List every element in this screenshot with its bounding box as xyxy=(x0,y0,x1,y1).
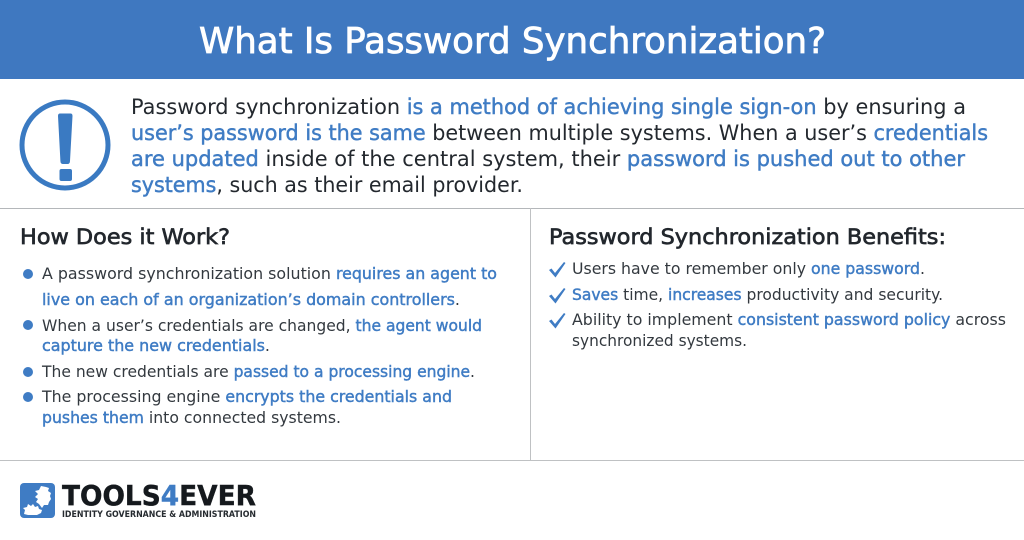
intro text block: Password synchronization is a method of achieving single sign-on by ensuring a xyxy=(131,95,966,120)
check list: benefits: synchronized systems. xyxy=(572,331,747,350)
bullet list: steps: capture the new credentials. xyxy=(42,336,270,355)
check list: benefits: Ability to implement consistent password policy across xyxy=(572,310,1006,329)
bullet list: steps: The new credentials are passed to a processing engine. xyxy=(41,362,475,381)
intro text block: systems, such as their email provider. xyxy=(131,173,523,198)
icon: exclamation mark in circle xyxy=(22,102,108,188)
icon: logo mark xyxy=(20,483,55,518)
check list: benefits xyxy=(549,259,1006,350)
bullet list: steps: The processing engine encrypts the credentials and xyxy=(41,387,452,406)
bullet list: steps: pushes them into connected systems. xyxy=(42,408,341,427)
intro text block: are updated inside of the central system, their password is pushed out to other xyxy=(131,147,965,172)
bullet list: steps: live on each of an organization’s domain controllers. xyxy=(42,290,460,309)
intro text block: user’s password is the same between multiple systems. When a user’s credentials xyxy=(131,121,988,146)
panel: benefits xyxy=(549,225,1006,350)
heading: benefits: Password Synchronization Benefits: xyxy=(549,225,946,250)
bullet list: steps xyxy=(23,264,497,427)
bullet list: steps: A password synchronization solution requires an agent to xyxy=(42,264,497,283)
intro text block xyxy=(131,95,988,198)
heading: how does it work: How Does it Work? xyxy=(20,225,230,250)
bullet list: steps: When a user’s credentials are changed, the agent would xyxy=(42,316,482,335)
wordmark: TOOLS4EVER xyxy=(62,480,256,512)
header banner xyxy=(0,0,1024,79)
logo: Tools4ever xyxy=(20,480,256,520)
check list: benefits: Saves time, increases productivity and security. xyxy=(572,285,943,304)
check list: benefits: Users have to remember only one password. xyxy=(572,259,925,278)
panel: how does it work xyxy=(20,225,497,427)
title: What Is Password Synchronization? xyxy=(199,21,826,62)
tagline: IDENTITY GOVERNANCE & ADMINISTRATION xyxy=(62,510,256,520)
